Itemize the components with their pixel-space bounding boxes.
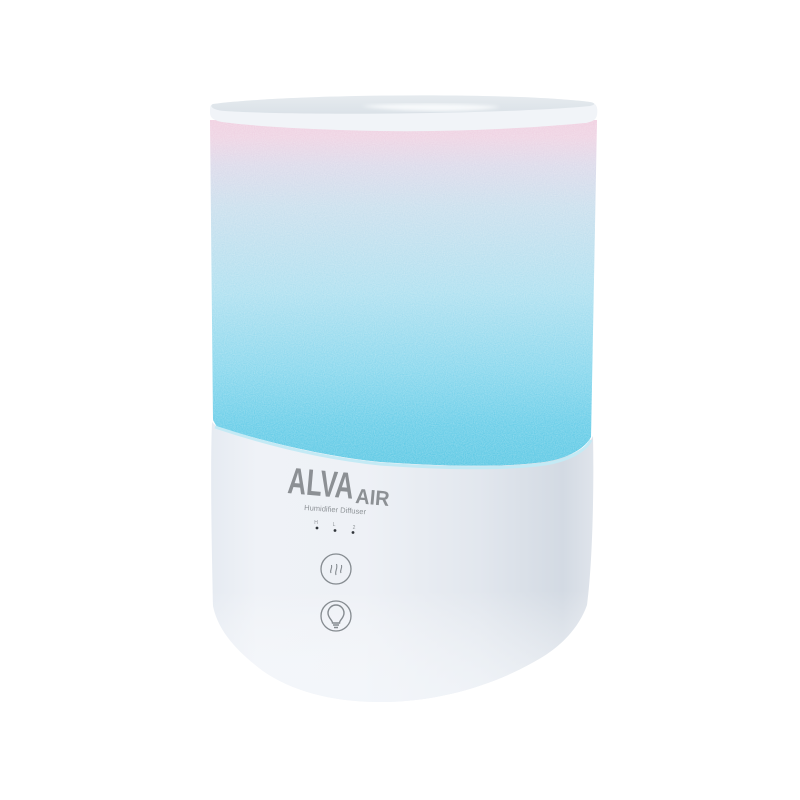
lid — [210, 95, 597, 131]
mode indicators: L — [333, 522, 336, 528]
logo: ALVA AIR: AIR — [355, 485, 390, 511]
lid highlight — [362, 104, 500, 111]
mode indicators: 2 — [353, 525, 356, 531]
infographic: humidifier product image — [210, 95, 598, 702]
logo: ALVA AIR: ALVA — [286, 460, 356, 507]
mode indicators — [314, 520, 356, 534]
lid top surface — [211, 95, 594, 114]
tank: pink-to-blue gradient body — [210, 120, 597, 470]
icon: light button — [321, 601, 351, 631]
base rim glow — [215, 427, 591, 468]
base: white housing — [211, 422, 593, 702]
mode indicators: H — [314, 520, 318, 526]
icon: mist button — [321, 554, 351, 584]
product name: Humidifier Diffuser — [304, 503, 367, 516]
